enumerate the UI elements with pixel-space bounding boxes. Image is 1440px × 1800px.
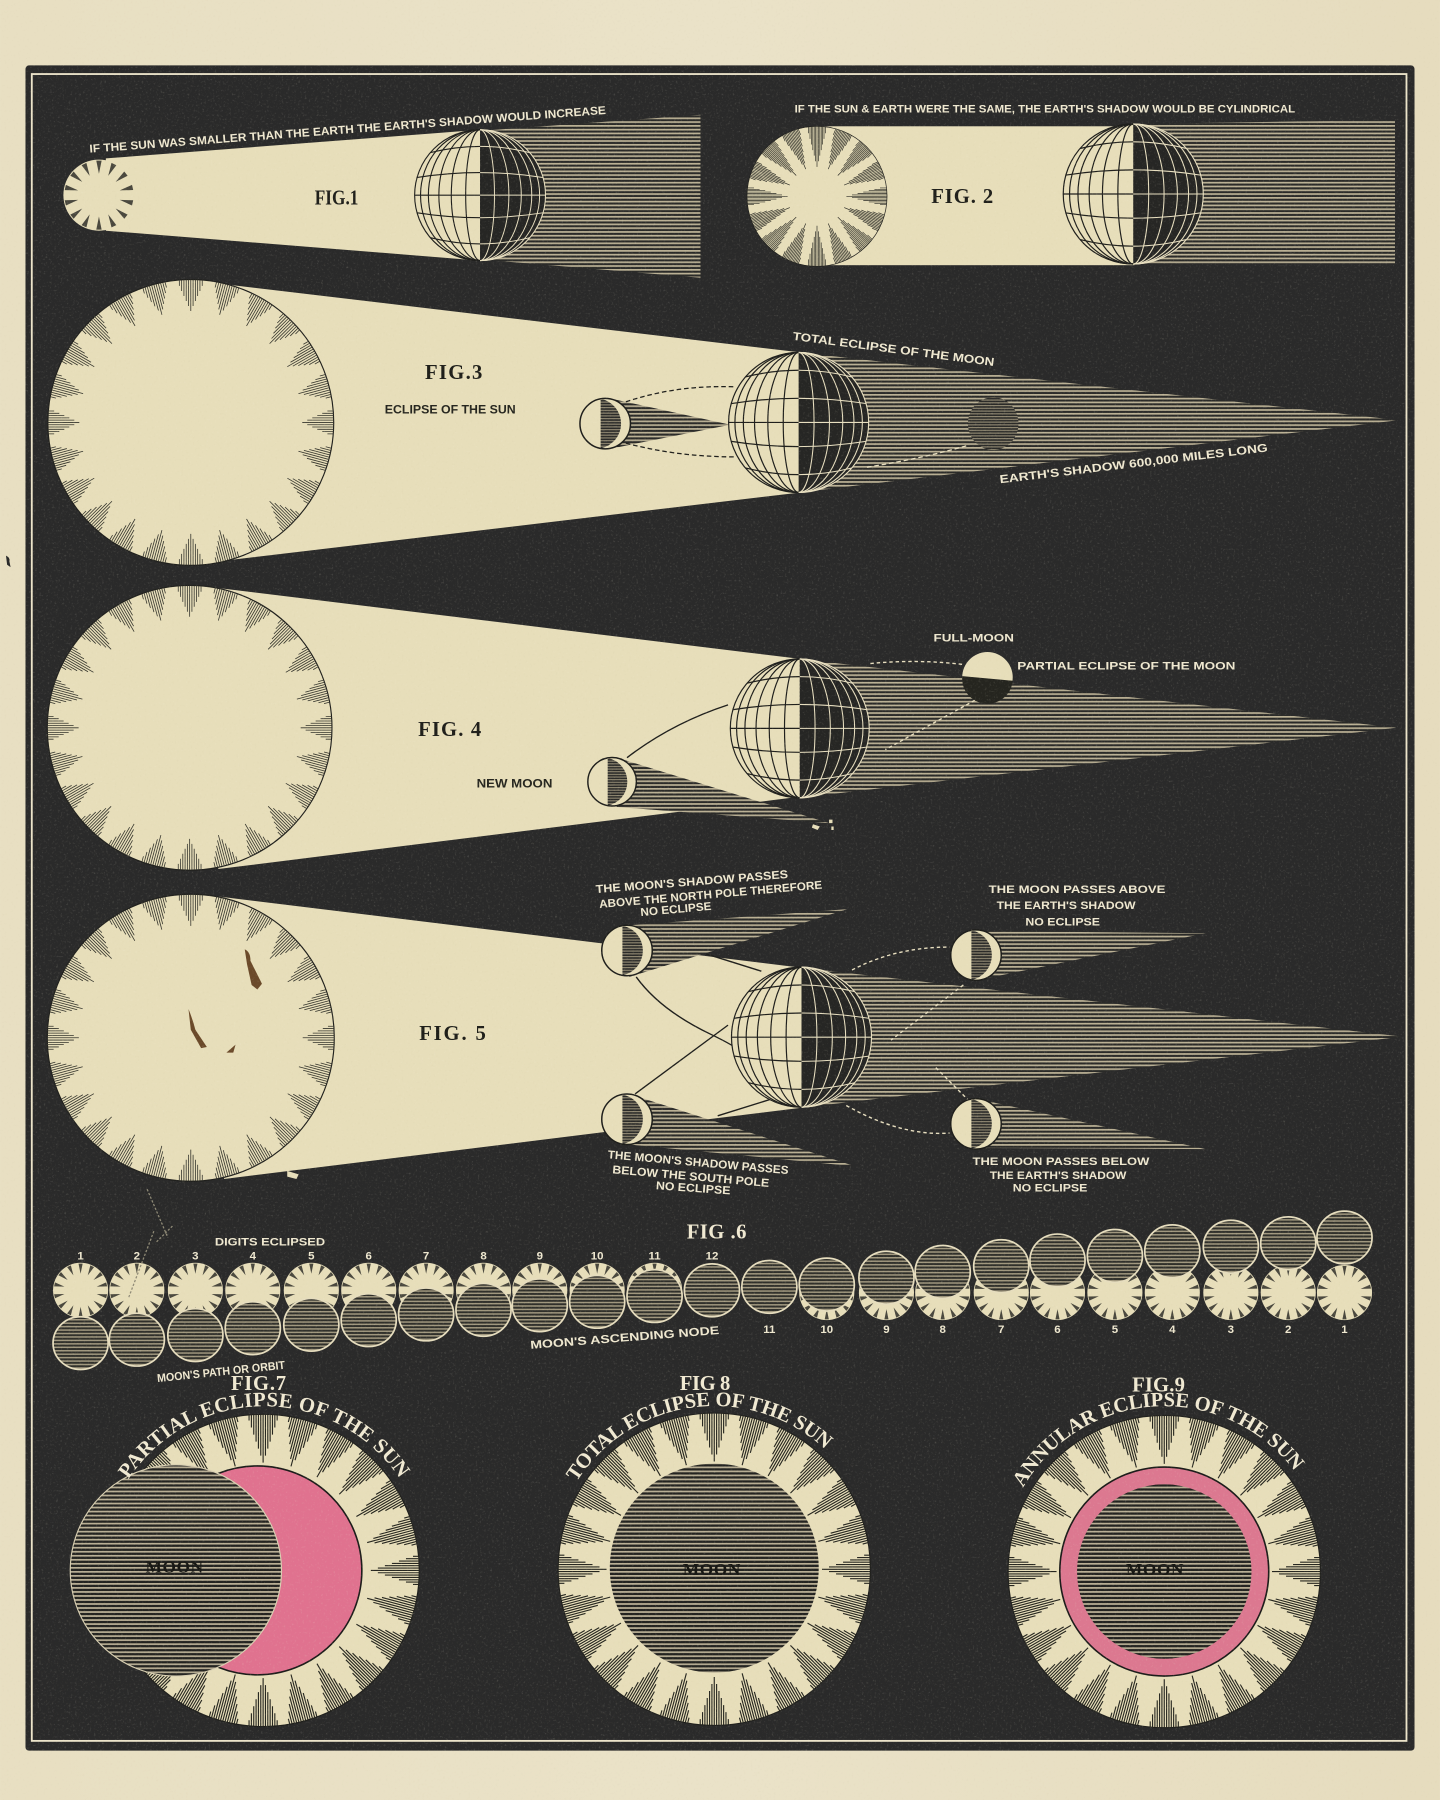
figure 2: sun and earth same size: [747, 104, 1395, 266]
caption lower left: NO ECLIPSE: [656, 1180, 731, 1198]
caption lower right: THE EARTH'S SHADOW: [990, 1170, 1127, 1182]
fig label: FIG.7: [231, 1373, 286, 1395]
ascending node label: MOON'S ASCENDING NODE: [530, 1325, 720, 1352]
globe: [415, 130, 546, 261]
total eclipse label: TOTAL ECLIPSE OF THE MOON: [792, 331, 995, 369]
caption upper right: THE MOON PASSES ABOVE: [989, 884, 1166, 896]
caption upper right: [989, 884, 1166, 928]
earth shadow: [802, 968, 1402, 1108]
globe: [1063, 124, 1203, 264]
digit numbers lower: 8: [940, 1324, 947, 1336]
figure 7: partial eclipse of the sun: [70, 1373, 420, 1727]
lower left shadow cone: [629, 1094, 855, 1166]
full moon partly eclipsed: [962, 652, 1013, 704]
spot below sun: [287, 1171, 299, 1179]
left series: moons: [53, 1264, 740, 1370]
light beam: [106, 130, 480, 261]
caption: IF THE SUN & EARTH WERE THE SAME, THE EARTH'S SHADOW WOULD BE CYLINDRICAL: [795, 104, 1295, 116]
small sun: [53, 160, 135, 236]
fig label: FIG. 5: [419, 1023, 486, 1045]
figure 8: total eclipse of the sun: [558, 1373, 871, 1726]
arc title: TOTAL ECLIPSE OF THE SUN: [566, 1392, 834, 1480]
stray margin mark: [6, 556, 11, 567]
digit numbers lower: 3: [1228, 1324, 1234, 1336]
fig label: FIG.1: [315, 187, 358, 209]
pink sun disc: [153, 1466, 362, 1675]
caption lower right: THE MOON PASSES BELOW: [973, 1156, 1150, 1168]
moon orbit: [626, 387, 968, 467]
digit numbers lower: 1: [1341, 1324, 1348, 1336]
moon: [70, 1465, 281, 1676]
sun: [42, 581, 337, 875]
upper right shadow cone: [976, 931, 1206, 980]
figure 1: sun smaller than earth: [53, 105, 700, 278]
moon: [610, 1464, 819, 1673]
digit numbers upper: 5: [308, 1250, 315, 1262]
caption upper left: NO ECLIPSE: [640, 901, 712, 919]
sublabel: ECLIPSE OF THE SUN: [385, 402, 516, 416]
caption upper left: THE MOON'S SHADOW PASSES: [595, 869, 789, 896]
digit numbers lower: 2: [1285, 1324, 1291, 1336]
globe: [729, 352, 869, 492]
new moon: [580, 398, 630, 449]
digit numbers lower: 7: [998, 1324, 1004, 1336]
pink annulus: [1060, 1467, 1269, 1676]
sun: [42, 889, 339, 1186]
digit numbers upper: [77, 1250, 718, 1262]
digit numbers upper: 6: [366, 1250, 372, 1262]
digit numbers upper: 1: [77, 1250, 84, 1262]
caption upper right: NO ECLIPSE: [1025, 916, 1100, 928]
caption lower left: THE MOON'S SHADOW PASSES: [607, 1149, 789, 1177]
caption lower left: BELOW THE SOUTH POLE: [612, 1164, 770, 1190]
digit numbers upper: 4: [250, 1250, 257, 1262]
fig label: FIG 8: [680, 1373, 730, 1395]
earth shadow: [480, 115, 700, 278]
moons: [602, 925, 1001, 1149]
digit numbers lower: 9: [883, 1324, 890, 1336]
moon in shadow: [968, 397, 1018, 450]
new moon label: NEW MOON: [477, 777, 552, 791]
stains on sun: [188, 949, 262, 1053]
earth shadow: [799, 352, 1398, 492]
globe: [731, 967, 872, 1107]
upper left shadow cone: [629, 909, 847, 977]
arc title: PARTIAL ECLIPSE OF THE SUN: [118, 1392, 410, 1479]
figure 4: partial eclipse of the moon: [42, 581, 1396, 875]
debris dots at shadow tip: [812, 820, 834, 830]
digits eclipsed label: DIGITS ECLIPSED: [215, 1237, 325, 1249]
light beam: [218, 284, 800, 561]
sun: [1002, 1409, 1326, 1734]
caption upper left: ABOVE THE NORTH POLE THEREFORE: [599, 880, 823, 911]
figure 6: digits eclipsed sequence: [45, 1211, 1372, 1385]
digit numbers upper: 3: [192, 1250, 199, 1262]
moon shadow cone: [610, 398, 730, 449]
globe: [730, 659, 869, 798]
left series: suns: [45, 1263, 682, 1322]
right series: suns: [791, 1265, 1372, 1324]
sun: [101, 1408, 425, 1733]
digit numbers upper: 7: [423, 1250, 429, 1262]
caption upper right: THE EARTH'S SHADOW: [997, 900, 1136, 912]
fig 6 label: FIG .6: [687, 1222, 746, 1244]
arc title: ANNULAR ECLIPSE OF THE SUN: [1014, 1392, 1305, 1488]
full moon label: FULL-MOON: [934, 633, 1014, 645]
digit numbers lower: 4: [1169, 1324, 1176, 1336]
moon: [1077, 1484, 1252, 1659]
figure 9: annular eclipse of the sun: [1008, 1374, 1321, 1728]
shadow length label: EARTH'S SHADOW 600,000 MILES LONG: [999, 442, 1268, 486]
light beam: [218, 897, 802, 1179]
digit numbers upper: 12: [706, 1250, 718, 1262]
moon label: MOON: [1126, 1560, 1184, 1579]
digit numbers lower: 10: [820, 1324, 833, 1336]
light beam: [818, 126, 1134, 265]
caption lower left: [607, 1149, 789, 1198]
earth shadow: [1133, 120, 1395, 264]
light beam: [207, 587, 800, 869]
digit numbers lower: 11: [763, 1324, 776, 1336]
sun: [747, 126, 887, 266]
sun: [43, 275, 339, 570]
digit numbers lower: [763, 1324, 1348, 1336]
new moon shadow cone: [617, 758, 829, 823]
caption lower right: NO ECLIPSE: [1013, 1183, 1088, 1195]
caption upper left: [595, 869, 823, 919]
digit numbers lower: 5: [1112, 1324, 1119, 1336]
right series: moons: [742, 1211, 1372, 1313]
digit numbers upper: 2: [134, 1250, 140, 1262]
moon label: MOON: [683, 1560, 741, 1579]
digit numbers upper: 11: [649, 1250, 661, 1262]
digit numbers upper: 8: [480, 1250, 487, 1262]
digit numbers upper: 10: [591, 1250, 604, 1262]
figure 3: total eclipse of the moon: [43, 275, 1398, 570]
fig label: FIG. 4: [418, 719, 481, 741]
sun: [552, 1407, 876, 1731]
caption lower right: [973, 1156, 1150, 1195]
partial eclipse label: PARTIAL ECLIPSE OF THE MOON: [1017, 660, 1235, 672]
scratch marks above fig 6: [129, 1189, 172, 1297]
lower right shadow cone: [976, 1099, 1206, 1149]
moon label: MOON: [146, 1558, 204, 1577]
new moon: [588, 758, 636, 806]
caption: IF THE SUN WAS SMALLER THAN THE EARTH THE EARTH'S SHADOW WOULD INCREASE: [89, 105, 607, 156]
figure 5: moon passing above and below: [42, 869, 1402, 1198]
fig label: FIG. 2: [931, 186, 993, 208]
earth shadow: [799, 659, 1396, 798]
orbit label: MOON'S PATH OR ORBIT: [157, 1360, 286, 1385]
digit numbers lower: 6: [1054, 1324, 1061, 1336]
fig label: FIG.3: [425, 362, 482, 384]
fig label: FIG.9: [1132, 1374, 1185, 1396]
moon orbit: [627, 661, 975, 758]
moon orbits: [635, 947, 978, 1133]
digit numbers upper: 9: [537, 1250, 543, 1262]
